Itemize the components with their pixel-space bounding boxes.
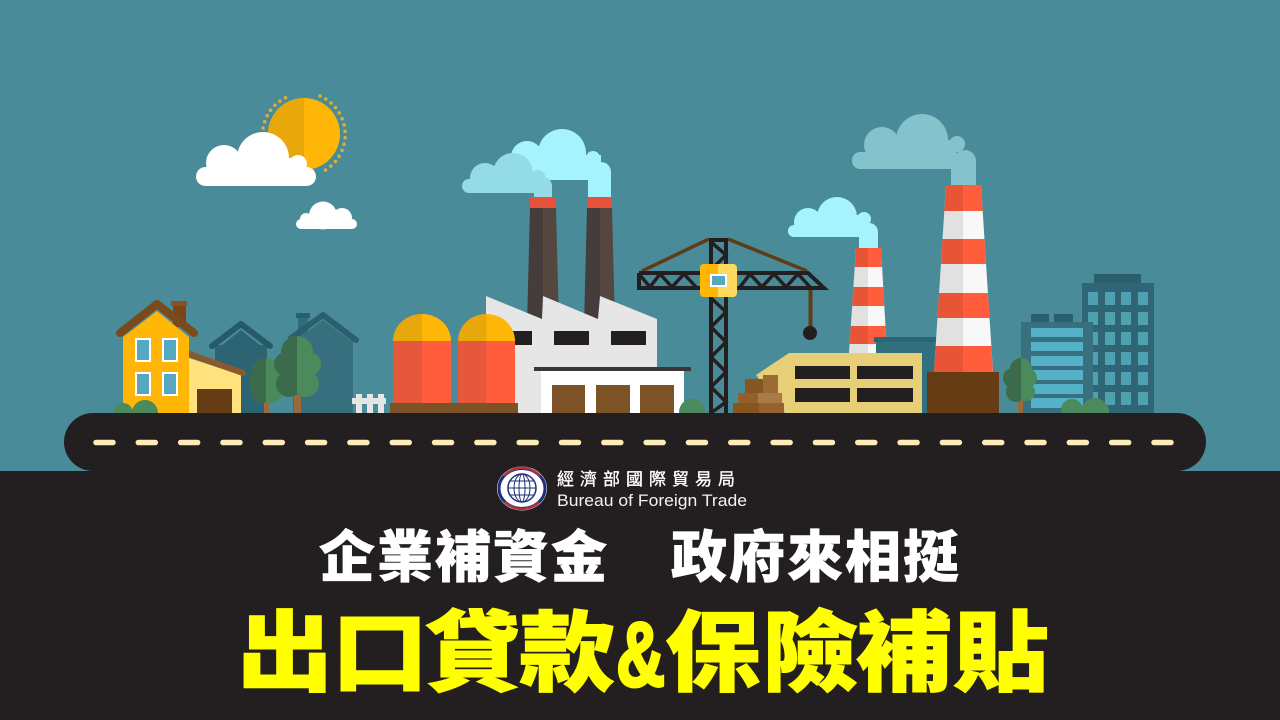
big chimney smoke [852, 114, 976, 186]
short office building [1021, 314, 1093, 413]
factory chimney right [584, 197, 615, 325]
main title [237, 604, 1049, 706]
subtitle: 企業補資金政府來相挺 [319, 526, 959, 589]
factory chimney left [527, 197, 559, 325]
factory building [486, 296, 691, 413]
striped chimney small [849, 248, 886, 353]
striped chimney large [934, 185, 993, 372]
road [64, 413, 1206, 471]
logo English name: Bureau of Foreign Trade [557, 492, 747, 510]
brick pile [733, 375, 784, 413]
pale blue smoke [462, 153, 552, 198]
tree large left [274, 336, 321, 413]
storage silos [390, 314, 518, 413]
dark footer panel [0, 471, 1280, 720]
logo: Bureau of Foreign Trade [497, 466, 747, 510]
white fence [352, 394, 386, 413]
logo Chinese name: 經濟部國際貿易局 [557, 470, 741, 489]
light blue smoke [511, 129, 611, 198]
main title: 保險補貼 [665, 605, 1049, 703]
tall office building [1082, 274, 1154, 413]
main title: & [616, 604, 665, 706]
road dashes [96, 440, 1172, 445]
sky background [0, 0, 1280, 472]
back teal building [874, 337, 936, 413]
tree right [1003, 358, 1037, 413]
emblem [497, 466, 547, 510]
chimney brown base [927, 372, 999, 413]
icon: sun [263, 96, 345, 173]
twin chimney smoke [462, 129, 611, 198]
yellow house [113, 301, 243, 426]
main title: 出口貸款 [237, 605, 615, 703]
bush by factory [679, 399, 705, 425]
construction crane [639, 238, 824, 413]
yellow warehouse [756, 353, 922, 413]
bush right [1061, 398, 1109, 426]
tree small left [249, 358, 283, 413]
back house right [291, 313, 356, 413]
back house left [212, 324, 270, 413]
small chimney smoke [788, 197, 878, 249]
icon: large white cloud [196, 132, 316, 186]
crane cab [700, 264, 737, 297]
icon: small white cloud [296, 202, 357, 230]
